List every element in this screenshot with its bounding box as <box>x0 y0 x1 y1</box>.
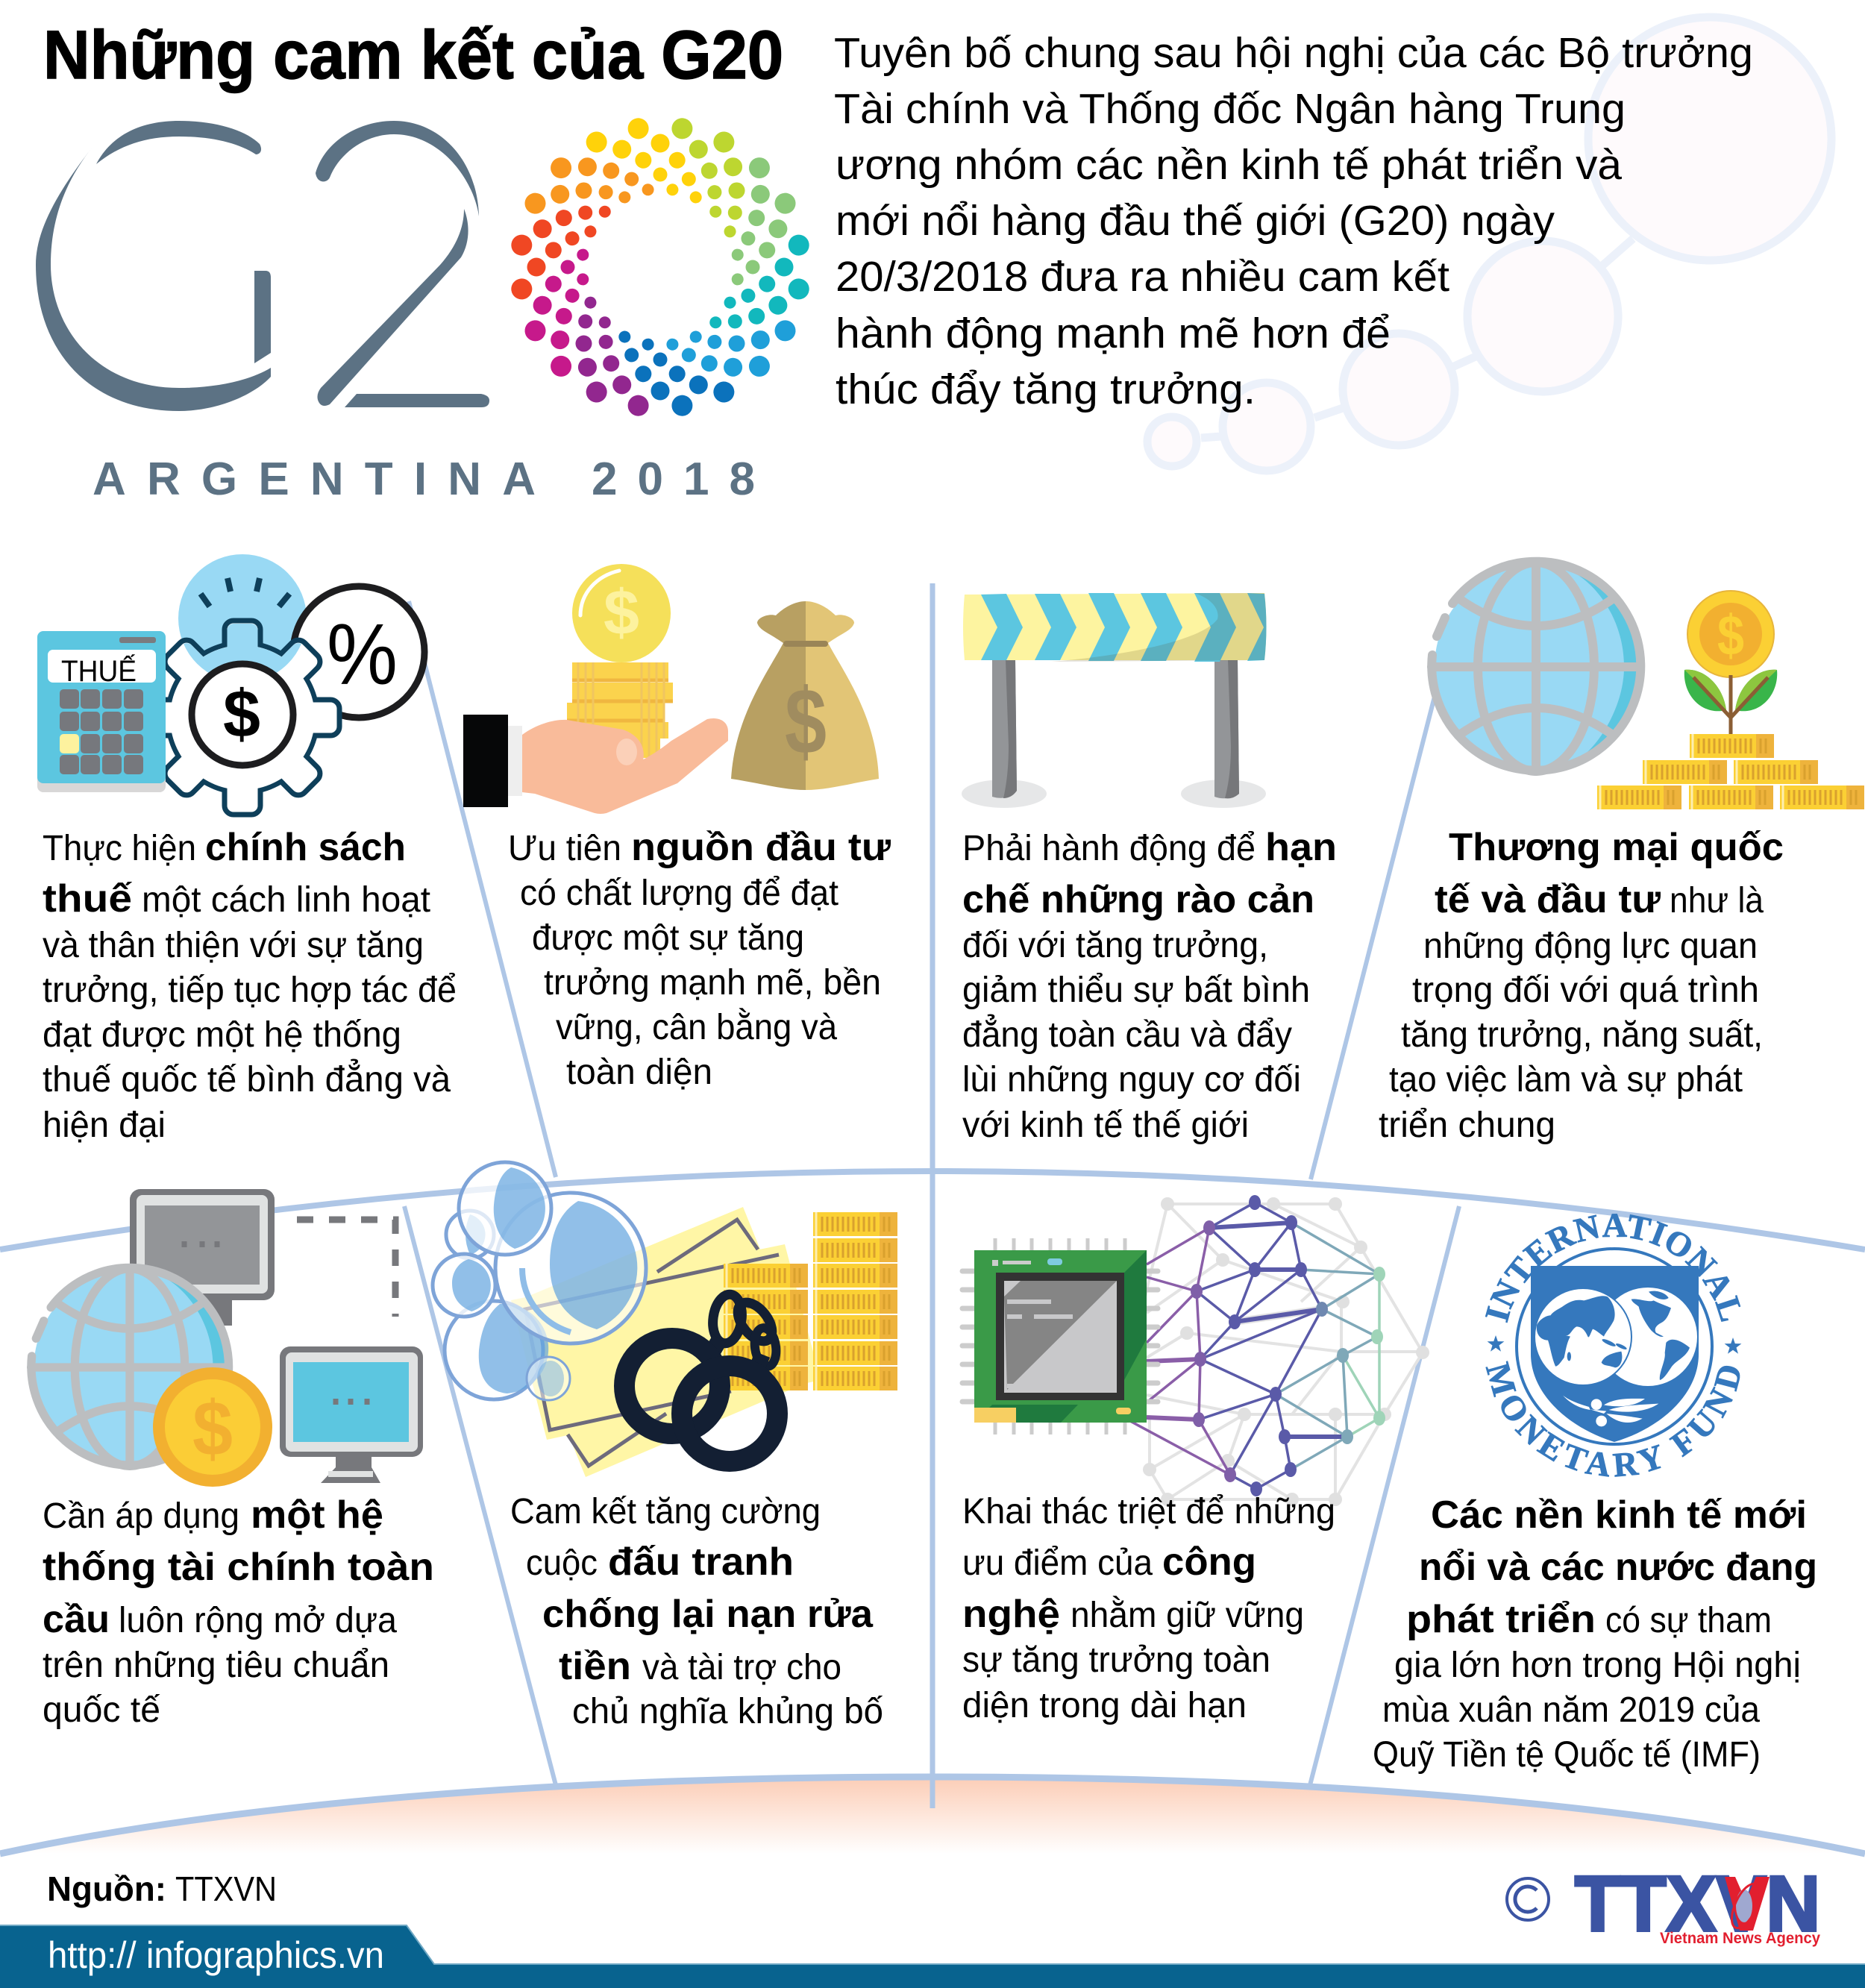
text: global financial system: cầu <box>43 1598 110 1641</box>
icon: calculator <box>37 631 166 792</box>
icon: dollar coin: $ <box>192 1386 233 1473</box>
text: tax policy: trưởng, tiếp tục hợp tác để <box>43 971 457 1010</box>
text: technology: sự tăng trưởng toàn <box>962 1640 1270 1680</box>
TTXVN logo: TTXVN <box>1575 1860 1820 1948</box>
icon: hand and cuff <box>463 715 728 814</box>
text: emerging economies: Quỹ Tiền tệ Quốc tế (IMF) <box>1373 1735 1761 1775</box>
intro paragraph: thúc đẩy tăng trưởng. <box>836 366 1256 413</box>
text: barriers: với kinh tế thế giới <box>962 1106 1249 1145</box>
text: tax policy: và thân thiện với sự tăng <box>43 926 424 965</box>
text: investment: trưởng mạnh mẽ, bền <box>544 963 881 1003</box>
text: trade and investment: triển chung <box>1379 1106 1555 1145</box>
icon: blue monitor <box>280 1346 423 1483</box>
copyright mark <box>1507 1878 1549 1920</box>
logo letters G2 <box>36 121 489 411</box>
background bubbles <box>1147 17 1831 471</box>
icon: money notes <box>511 1207 821 1477</box>
icon: money bag <box>731 601 879 790</box>
intro paragraph <box>834 29 1753 413</box>
logo caption <box>93 454 755 505</box>
text: emerging economies <box>1373 1493 1817 1775</box>
text: anti money laundering: cuộc <box>526 1543 598 1583</box>
text: emerging economies: có sự tham <box>1605 1601 1772 1640</box>
text: anti money laundering: Cam kết tăng cường <box>510 1492 821 1531</box>
icon: money plant: $ <box>1717 604 1744 668</box>
text: trade and investment: tế và đầu tư <box>1435 878 1661 921</box>
panel: trade and investment <box>1379 562 1864 1145</box>
source credit: TTXVN <box>175 1869 277 1908</box>
intro paragraph: ương nhóm các nền kinh tế phát triển và <box>836 141 1622 189</box>
intro paragraph: mới nổi hàng đầu thế giới (G20) ngày <box>836 197 1555 245</box>
text: global financial system <box>43 1493 434 1730</box>
icon: yellow coin: $ <box>604 577 639 648</box>
text: barriers <box>962 826 1337 1145</box>
text: emerging economies: Các nền kinh tế mới <box>1431 1493 1807 1537</box>
icon: IMF emblem <box>1485 1214 1741 1477</box>
text: tax policy <box>43 826 457 1145</box>
text: tax policy: Thực hiện <box>43 829 196 868</box>
icon: handcuffs <box>624 1293 779 1461</box>
logo caption: 2018 <box>592 454 755 505</box>
text: tax policy: một cách linh hoạt <box>142 880 430 920</box>
icon: gear with dollar: $ <box>223 677 260 752</box>
text: anti money laundering: chủ nghĩa khủng bố <box>572 1692 883 1731</box>
text: global financial system: một hệ <box>251 1493 383 1537</box>
text: anti money laundering: và tài trợ cho <box>642 1648 841 1687</box>
G20 logo <box>36 116 811 505</box>
text: trade and investment: trọng đối với quá trình <box>1412 971 1759 1010</box>
text: investment: Ưu tiên <box>508 829 621 868</box>
text: anti money laundering: chống lại nạn rửa <box>542 1593 874 1636</box>
source credit: Nguồn: <box>47 1869 166 1908</box>
logo caption: ARGENTINA <box>93 454 536 505</box>
text: barriers: hạn <box>1265 826 1337 869</box>
text: global financial system: luôn rộng mở dựa <box>119 1601 397 1640</box>
icon: money plant <box>1684 591 1777 734</box>
text: investment: toàn diện <box>566 1053 712 1092</box>
text: barriers: đẳng toàn cầu và đẩy <box>962 1014 1292 1055</box>
text: trade and investment <box>1379 826 1784 1145</box>
title: Những cam kết của G20 <box>43 17 783 93</box>
icon: coin stack <box>567 662 673 758</box>
text: emerging economies: gia lớn hơn trong Hội nghị <box>1394 1646 1801 1685</box>
icon: microchip <box>962 1238 1158 1434</box>
icon: yellow coin <box>572 564 671 662</box>
icon: percent circle <box>293 586 424 718</box>
icon: blue sun circle <box>178 554 307 683</box>
text: emerging economies: nổi và các nước đang <box>1419 1546 1817 1589</box>
text: investment: được một sự tăng <box>532 918 804 958</box>
text: global financial system: Cần áp dụng <box>43 1496 239 1536</box>
text: technology: nhằm giữ vững <box>1071 1595 1304 1635</box>
TTXVN logo: Vietnam News Agency <box>1660 1930 1820 1947</box>
icon: IMF emblem: INTERNATIONAL <box>1485 1214 1741 1323</box>
text: investment: nguồn đầu tư <box>631 826 891 869</box>
icon: globe <box>31 1267 229 1466</box>
icon: gear with dollar <box>166 618 342 818</box>
logo dot ring <box>510 116 811 418</box>
text: technology: công <box>1162 1540 1256 1584</box>
text: technology <box>962 1492 1335 1725</box>
text: anti money laundering: tiền <box>559 1645 631 1688</box>
icon: coin blocks <box>724 1212 897 1390</box>
panel: emerging economies <box>1373 1214 1817 1775</box>
intro paragraph: 20/3/2018 đưa ra nhiều cam kết <box>836 253 1449 301</box>
text: investment: có chất lượng để đạt <box>520 874 839 913</box>
text: global financial system: thống tài chính toàn <box>43 1546 434 1589</box>
text: technology: nghệ <box>962 1593 1060 1636</box>
text: technology: diện trong dài hạn <box>962 1686 1247 1725</box>
text: tax policy: đạt được một hệ thống <box>43 1015 401 1055</box>
text: investment <box>508 826 891 1092</box>
icon: dollar coin <box>153 1367 272 1487</box>
text: technology: Khai thác triệt để những <box>962 1492 1335 1531</box>
text: tax policy: thuế quốc tế bình đẳng và <box>43 1059 451 1100</box>
icon: neural network <box>1130 1195 1429 1506</box>
text: trade and investment: tạo việc làm và sự phát <box>1389 1060 1743 1100</box>
bottom glow and arc <box>0 1777 1865 1854</box>
icon: soap bubbles <box>433 1162 646 1400</box>
icon: money bag: $ <box>785 670 827 774</box>
panel: investment <box>463 564 891 1092</box>
dividing lines and upper arc <box>0 583 1865 1808</box>
panel: global financial system <box>31 1189 434 1730</box>
text: global financial system: trên những tiêu chuẩn <box>43 1646 389 1685</box>
icon: dashed connector <box>297 1220 395 1317</box>
text: barriers: Phải hành động để <box>962 829 1256 868</box>
text: barriers: đối với tăng trưởng, <box>962 926 1268 965</box>
text: trade and investment: Thương mại quốc <box>1449 826 1784 869</box>
footer band <box>0 1925 1865 1988</box>
icon: grey monitor <box>130 1189 275 1326</box>
source credit <box>47 1869 277 1908</box>
text: tax policy: thuế <box>43 877 132 921</box>
panel: tax policy <box>37 554 457 1145</box>
text: barriers: chế những rào cản <box>962 878 1314 921</box>
text: trade and investment: như là <box>1670 881 1764 921</box>
text: trade and investment: tăng trưởng, năng suất, <box>1401 1015 1763 1055</box>
icon: globe <box>1432 562 1640 771</box>
text: technology: ưu điểm của <box>962 1543 1153 1583</box>
icon: calculator: THUẾ <box>61 653 137 688</box>
icon: road barrier <box>962 593 1267 808</box>
icon: coin blocks <box>1597 734 1864 809</box>
text: emerging economies: phát triển <box>1406 1598 1596 1641</box>
panel: barriers <box>962 593 1337 1145</box>
text: global financial system: quốc tế <box>43 1690 160 1730</box>
icon: IMF emblem: MONETARY FUND <box>1485 1361 1740 1477</box>
text: investment: vững, cân bằng và <box>556 1007 837 1047</box>
text: barriers: giảm thiểu sự bất bình <box>962 971 1310 1010</box>
text: emerging economies: mùa xuân năm 2019 của <box>1382 1690 1760 1730</box>
panel: anti money laundering <box>433 1162 897 1731</box>
intro paragraph: Tài chính và Thống đốc Ngân hàng Trung <box>834 85 1626 133</box>
icon: percent circle: % <box>327 606 398 703</box>
panel: technology <box>962 1195 1429 1725</box>
text: tax policy: chính sách <box>205 826 406 869</box>
text: tax policy: hiện đại <box>43 1106 166 1145</box>
footer band: http:// infographics.vn <box>48 1934 384 1976</box>
text: barriers: lùi những nguy cơ đối <box>962 1060 1301 1100</box>
text: anti money laundering <box>510 1492 883 1731</box>
text: anti money laundering: đấu tranh <box>608 1540 794 1584</box>
intro paragraph: Tuyên bố chung sau hội nghị của các Bộ trưởng <box>834 29 1753 77</box>
text: trade and investment: những động lực quan <box>1423 926 1758 966</box>
intro paragraph: hành động mạnh mẽ hơn để <box>836 310 1391 357</box>
